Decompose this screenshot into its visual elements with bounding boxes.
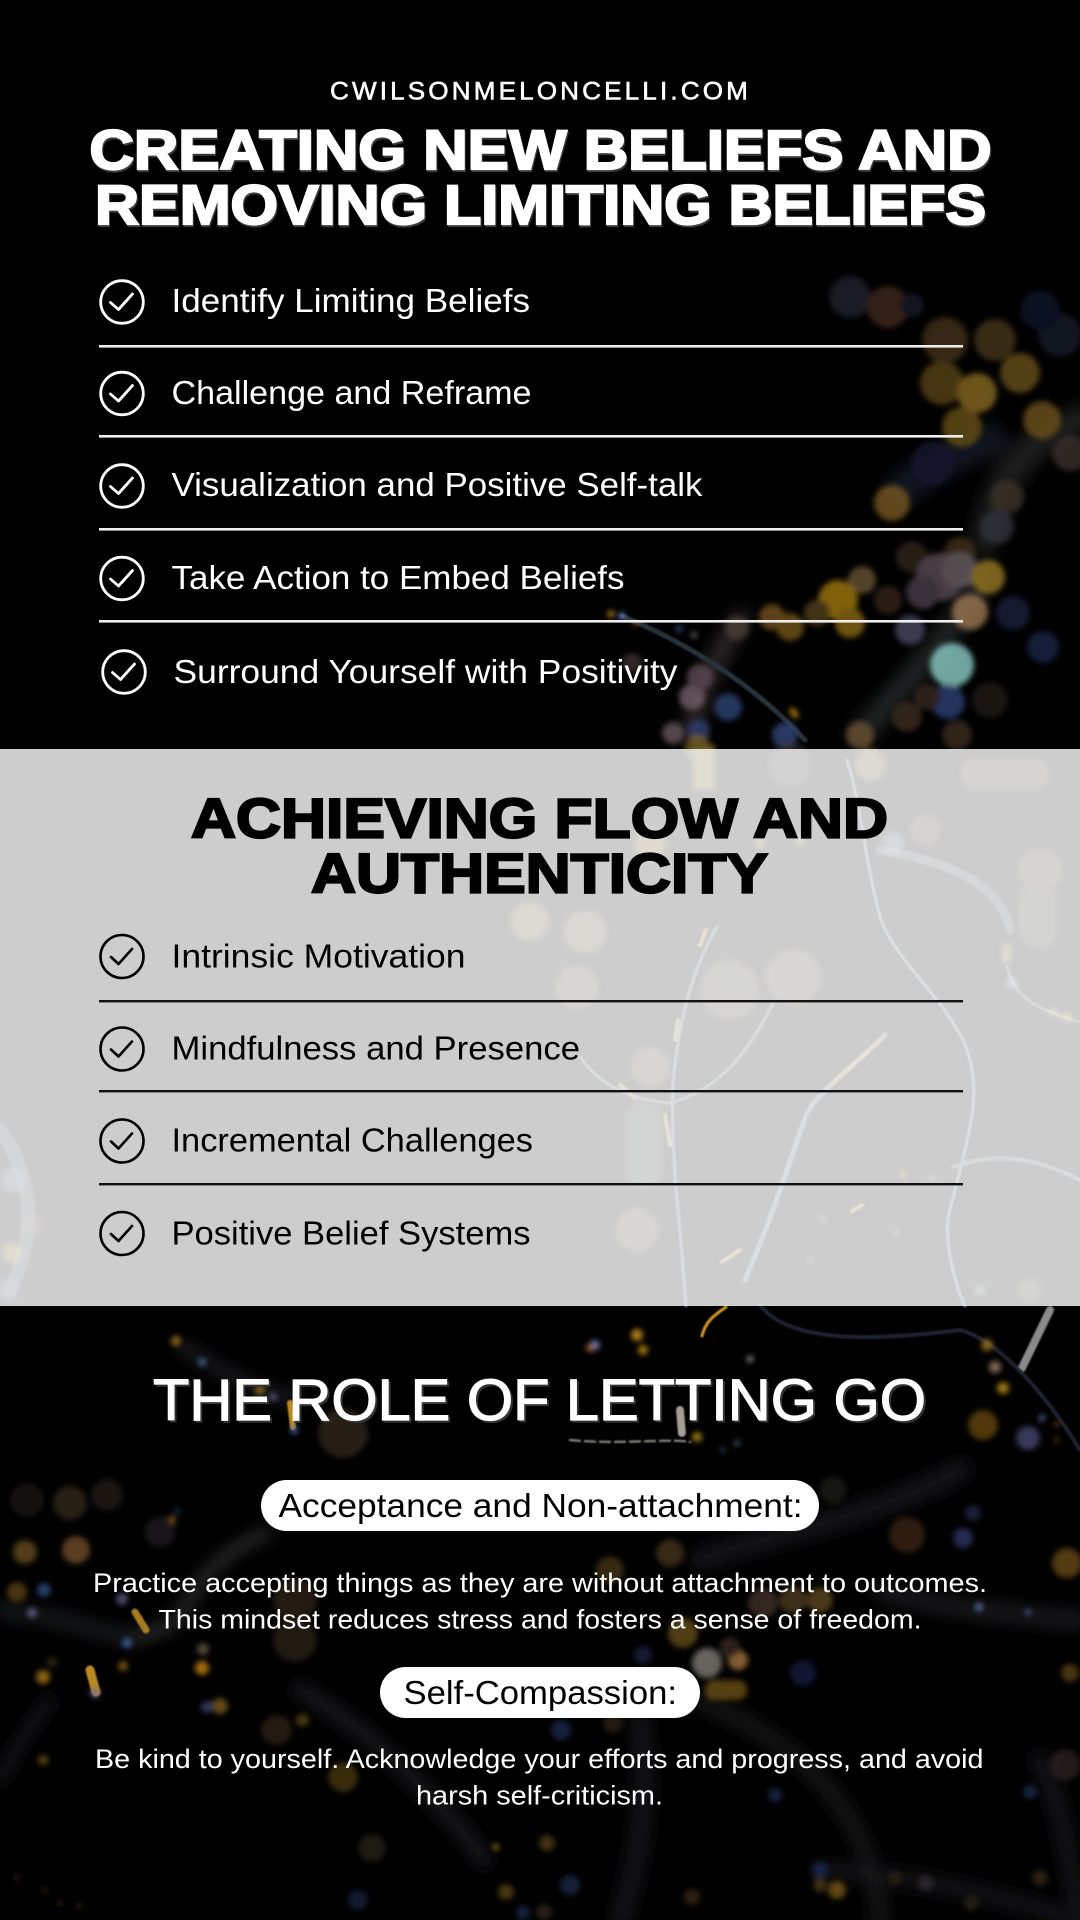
bottom section bokeh <box>171 1336 181 1346</box>
item: surround yourself: Surround Yourself with Positivity <box>174 653 678 690</box>
pill: acceptance and non-attachment <box>261 1480 819 1531</box>
item: incremental challenges <box>100 1120 533 1162</box>
paragraph: acceptance <box>93 1568 987 1634</box>
heading: ACHIEVING FLOW AND <box>191 786 888 850</box>
paragraph: acceptance: Practice accepting things as they are without attachment to outcomes. <box>93 1568 987 1598</box>
website label: CWILSONMELONCELLI.COM <box>330 78 751 106</box>
item: mindfulness and presence: Mindfulness and Presence <box>172 1030 580 1066</box>
item: positive belief systems <box>100 1212 530 1255</box>
heading <box>191 786 888 904</box>
item: intrinsic motivation <box>100 935 466 978</box>
paragraph: self-compassion: harsh self-criticism. <box>416 1780 663 1810</box>
item: positive belief systems: Positive Belief Systems <box>172 1214 530 1252</box>
strands behind the light panel <box>0 760 1080 1306</box>
pill: self-compassion <box>380 1667 700 1718</box>
paragraph: acceptance: This mindset reduces stress and fosters a sense of freedom. <box>158 1604 922 1634</box>
title <box>90 118 992 236</box>
upper right bokeh <box>829 276 871 318</box>
item: identify limiting beliefs: Identify Limiting Beliefs <box>172 282 530 319</box>
item: challenge and reframe: Challenge and Reframe <box>172 374 532 411</box>
item: intrinsic motivation: Intrinsic Motivation <box>172 938 466 974</box>
panel: the role of letting go <box>93 1368 987 1810</box>
paragraph: self-compassion: Be kind to yourself. Acknowledge your efforts and progress, and avoid <box>95 1744 984 1774</box>
checklist: limiting beliefs <box>99 281 963 693</box>
item: take action: Take Action to Embed Beliefs <box>172 559 624 596</box>
bokeh behind the light panel <box>0 735 1072 1302</box>
panel: creating new beliefs <box>90 78 992 693</box>
pill: self-compassion: Self-Compassion: <box>404 1674 677 1711</box>
title: REMOVING LIMITING BELIEFS <box>95 173 986 236</box>
item: mindfulness and presence <box>100 1028 580 1070</box>
checklist: flow <box>99 935 963 1255</box>
panel: achieving flow and authenticity <box>0 749 1080 1306</box>
item: identify limiting beliefs <box>101 281 530 323</box>
paragraph: self-compassion <box>95 1744 984 1810</box>
heading: THE ROLE OF LETTING GO <box>153 1368 926 1433</box>
heading: AUTHENTICITY <box>311 842 768 904</box>
item: incremental challenges: Incremental Challenges <box>172 1122 533 1158</box>
pill: acceptance and non-attachment: Acceptance and Non-attachment: <box>278 1487 802 1524</box>
item: visualization: Visualization and Positive Self-talk <box>172 466 703 503</box>
title: CREATING NEW BELIEFS AND <box>90 118 992 181</box>
